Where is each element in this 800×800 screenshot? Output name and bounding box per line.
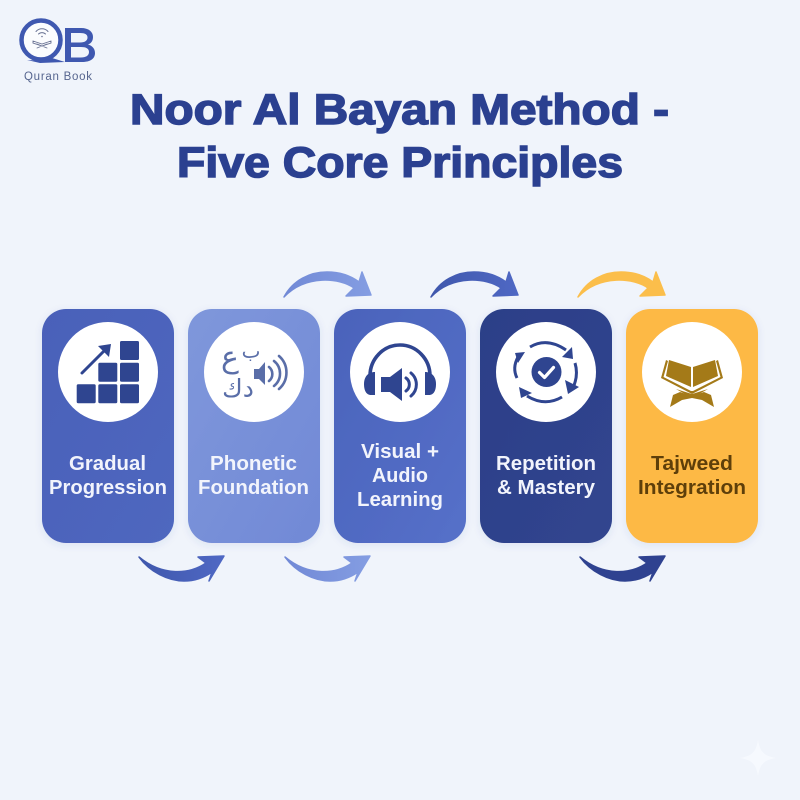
label: & Mastery [497, 477, 596, 499]
icon: Arabic letters with speaker: ع [221, 340, 239, 375]
label: Gradual [69, 453, 146, 475]
card: Tajweed Integration [626, 309, 758, 543]
arrow: repetition top [578, 272, 665, 297]
title: Five Core Principles [177, 139, 623, 187]
label [496, 453, 596, 499]
label: Visual + [361, 441, 439, 463]
logo: Quran Book [22, 20, 95, 83]
label [638, 453, 746, 499]
card background [334, 309, 466, 543]
card background [188, 309, 320, 543]
sparkle watermark [740, 740, 776, 776]
label: Repetition [496, 453, 596, 475]
arrow: visual top [431, 272, 518, 297]
icon: Arabic letters with speaker: ب [242, 339, 260, 363]
card: Gradual Progression [42, 309, 174, 543]
icon: Arabic letters with speaker [204, 322, 304, 422]
icon: headphones with speaker [350, 322, 450, 422]
arrow: phonetic top [284, 272, 371, 297]
logo wordmark: Quran Book [24, 71, 92, 83]
label: Progression [49, 477, 167, 499]
card: Repetition & Mastery [480, 309, 612, 543]
label: Integration [638, 477, 746, 499]
title [130, 86, 669, 187]
label: Tajweed [651, 453, 733, 475]
arrow: repetition bottom [580, 556, 665, 581]
label: Phonetic [210, 453, 297, 475]
logo letter B [65, 28, 95, 62]
label [357, 441, 443, 511]
icon: gradual progression blocks [58, 322, 158, 422]
label: Foundation [198, 477, 309, 499]
arrow: gradual bottom [139, 556, 224, 581]
icon: repetition cycle with check [496, 322, 596, 422]
label: Audio [372, 465, 428, 487]
arrow: phonetic bottom [285, 556, 370, 581]
icon: open Quran on stand [642, 322, 742, 422]
icon: Arabic letters with speaker: دك [222, 374, 254, 403]
title: Noor Al Bayan Method - [130, 86, 669, 134]
card background [42, 309, 174, 543]
label [198, 453, 309, 499]
label: Learning [357, 489, 443, 511]
card: Phonetic Foundation [188, 309, 320, 543]
card: Visual + Audio Learning [334, 309, 466, 543]
card background [480, 309, 612, 543]
label [49, 453, 167, 499]
logo Q ring [22, 20, 65, 63]
logo wifi and book emblem [33, 29, 51, 48]
card background [626, 309, 758, 543]
